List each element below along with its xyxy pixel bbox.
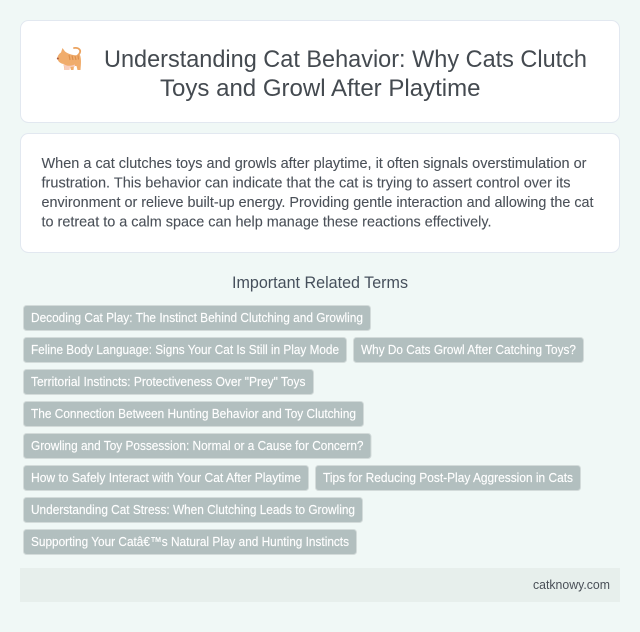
panel: description	[20, 134, 620, 252]
tag: safely interact	[24, 466, 308, 490]
paragraph text	[42, 155, 594, 230]
tag: why cats growl	[354, 338, 584, 362]
footer	[20, 568, 620, 602]
tag: natural instincts: Supporting Your Catâ€™s Natural Play and Hunting Instincts	[31, 534, 349, 549]
tag: cat stress	[24, 498, 362, 522]
tag: natural instincts	[24, 530, 356, 554]
tag: decoding cat play	[24, 306, 370, 330]
heading: related terms: Important Related Terms	[232, 274, 408, 292]
paragraph text: When a cat clutches toys and growls after playtime, it often signals overstimulation or	[42, 155, 586, 172]
icon: cat	[57, 48, 81, 70]
tag: feline body language	[24, 338, 346, 362]
tag: territorial instincts: Territorial Instincts: Protectiveness Over "Prey" Toys	[31, 374, 306, 389]
tag: decoding cat play: Decoding Cat Play: The Instinct Behind Clutching and Growling	[31, 310, 363, 325]
tag: territorial instincts	[24, 370, 314, 394]
paragraph text: frustration. This behavior can indicate that the cat is trying to assert control over its	[42, 174, 570, 192]
tag: feline body language: Feline Body Language: Signs Your Cat Is Still in Play Mode	[31, 342, 339, 357]
tag: growling and possession	[24, 434, 371, 458]
tag: hunting connection	[24, 402, 364, 426]
panel: title card	[20, 20, 620, 122]
paragraph text: to retreat to a calm space can help manage these reactions effectively.	[42, 214, 492, 230]
title line 2: Toys and Growl After Playtime	[160, 75, 480, 102]
paragraph text: environment or relieve built-up energy. Providing gentle interaction and allowing the cat	[42, 194, 594, 211]
title line 1: Understanding Cat Behavior: Why Cats Clutch	[104, 46, 587, 73]
footer site name: catknowy.com	[533, 577, 610, 592]
tag: cat stress: Understanding Cat Stress: When Clutching Leads to Growling	[31, 502, 355, 517]
tag: safely interact: How to Safely Interact with Your Cat After Playtime	[31, 470, 301, 485]
tag: why cats growl: Why Do Cats Growl After Catching Toys?	[361, 342, 576, 357]
tag: reducing aggression	[316, 466, 580, 490]
tag: reducing aggression: Tips for Reducing Post-Play Aggression in Cats	[323, 470, 573, 485]
tag: hunting connection: The Connection Between Hunting Behavior and Toy Clutching	[31, 406, 356, 421]
tag: growling and possession: Growling and Toy Possession: Normal or a Cause for Concern?	[31, 438, 364, 453]
